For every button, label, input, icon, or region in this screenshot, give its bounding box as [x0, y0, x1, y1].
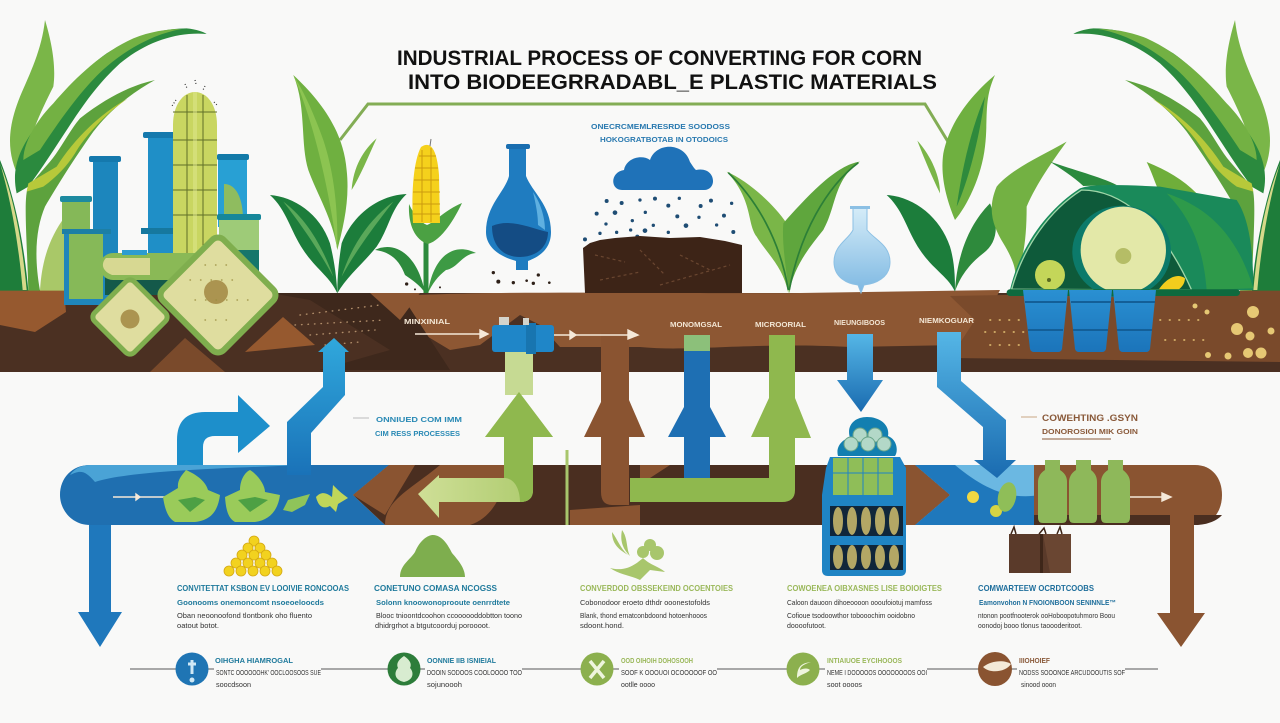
soil nuggets right	[1192, 304, 1274, 360]
title: INTO BIODEEGRRADABL_E PLASTIC MATERIALS	[408, 71, 937, 94]
tank: main left	[62, 229, 111, 305]
column 3 text: CONVERDOD OBSSEKEIND OCOENTOIES	[580, 583, 733, 593]
column 5 text: Eamonvohon N FNOIONBOON SENINNLE™	[979, 598, 1116, 607]
icon: green pile	[400, 535, 465, 577]
tank: upper left	[60, 196, 92, 231]
conveyor	[100, 250, 210, 280]
column 3 text: Blank, thond ernatconbdoond hotoenhooos	[580, 611, 707, 620]
cut block: small	[90, 277, 170, 357]
arrow: brown up	[584, 333, 645, 505]
column 4 text: Caloon dauoon dihoeoooon oooufoiotuj mamfoss	[787, 598, 932, 607]
left corn plant foliage	[0, 20, 207, 291]
small connector valve	[492, 317, 554, 354]
arrow: blue diagonal down	[937, 332, 1016, 478]
step 3	[580, 652, 717, 689]
icon: cloud	[613, 147, 713, 190]
pellets	[967, 480, 1019, 517]
arrow: blue down centre	[837, 334, 883, 412]
step 4: soot oooos	[827, 680, 862, 689]
column 4 text: Cofioue tsodoowthor tobooochim ooidobno	[787, 611, 915, 620]
soil labels: MICROORIAL	[755, 320, 806, 329]
column 5 text	[978, 583, 1116, 630]
arrow: blue curved right	[177, 395, 270, 465]
conveyor base	[105, 275, 255, 295]
step 5: sinood ooon	[1021, 680, 1056, 689]
step 2: OONNIE IIB ISNIEIAL	[427, 656, 496, 665]
column 4 text: COWOENEA OIBXASNES LISE BOIOIGTES	[787, 583, 942, 593]
column 2 text	[374, 583, 522, 630]
icon: sprig	[610, 530, 665, 580]
step 3: ootlle oooo	[621, 680, 655, 689]
title	[397, 47, 937, 94]
bottles	[1038, 460, 1130, 523]
soil specks below flask	[405, 271, 551, 290]
step 2: DOOIN SODOOS COOLOOOO TOO	[427, 668, 522, 677]
step 4: NEME I DOOOOOS OOOOOOOOS OOI	[827, 668, 927, 677]
column 4 text: doooofutoot.	[787, 621, 826, 630]
step 1: SONTC OOOOOOHK' OOCLOOSOOS SUE	[216, 668, 321, 677]
arrow: blue down left	[78, 525, 122, 647]
side caption left: ONNIUED COM IMM	[376, 415, 462, 424]
light flask	[834, 206, 890, 293]
label: caption above cloud: HOKOGRATBOTAB IN OTODOICS	[600, 135, 728, 144]
soil labels: MINXINIAL	[404, 317, 450, 326]
soil band	[0, 290, 1280, 372]
step 5: IIIOHOIEF	[1019, 656, 1050, 665]
column 2 text: CONETUNO COMASA NCOGSS	[374, 583, 497, 593]
arrow: brown down right	[1157, 500, 1205, 647]
side caption left: CIM RESS PROCESSES	[375, 429, 460, 438]
column 4 text	[787, 583, 942, 630]
leaves in pipe	[163, 470, 348, 522]
tube: tall centre	[141, 132, 177, 260]
step 1: OIHGHA HIAMROGAL	[215, 656, 293, 665]
side caption right: COWEHTING .GSYN	[1042, 413, 1138, 423]
flow arrows white	[113, 330, 1171, 501]
arrow: blue up with diagonal	[287, 338, 349, 475]
column 5 text: COMWARTEEW OCRDTCOOBS	[978, 583, 1094, 593]
column 3 text: Cobonodoor eroeto dthdr ooonestofolds	[580, 598, 710, 607]
soil labels: NIEMKOGUAR	[919, 316, 975, 325]
plant centre	[727, 162, 860, 293]
column 1 text: Oban neoonoofond tlontbonk oho fluento	[177, 611, 312, 620]
side caption left	[353, 415, 462, 438]
arrow: green U up	[630, 335, 811, 502]
blue cups	[1023, 290, 1156, 352]
step 3: SOOF K OOOUOI OCOOOOOF OO	[621, 668, 717, 677]
corn plant centre	[375, 139, 476, 293]
arrow: green up and left	[418, 345, 553, 518]
side caption right	[1021, 413, 1138, 439]
divider stem	[566, 450, 568, 525]
column 1 text: oatout botot.	[177, 621, 219, 630]
cut block: large	[157, 234, 279, 356]
step 5	[978, 652, 1125, 689]
column 2 text: Blooc tnioontdcoohon ccoooooddobtton toono	[376, 611, 522, 620]
arrow: blue up centre	[668, 335, 726, 478]
timeline	[130, 652, 1158, 689]
side caption right: DONOROSIOI MIK GOIN	[1042, 427, 1138, 436]
bag	[1009, 527, 1071, 573]
sprout plant right	[887, 75, 1067, 292]
falling dots	[583, 197, 735, 241]
soil mound	[583, 236, 742, 293]
column 5 text: oonodoj booo tlonus taoooderitoot.	[978, 621, 1082, 630]
tube: back right	[217, 154, 249, 227]
column 2 text: dhidrgrhot a btgutcoorduj poroooot.	[375, 621, 490, 630]
column 3 text: sdoont.hond.	[580, 621, 624, 630]
step 4	[786, 652, 927, 689]
step 3: OOD OIHOIH DOHOSOOH	[621, 656, 693, 665]
process pipe	[60, 465, 1222, 525]
seed box	[822, 417, 906, 576]
soil labels: MONOMGSAL	[670, 320, 722, 329]
title bracket line	[340, 104, 950, 145]
soil labels	[404, 316, 975, 329]
column 3 text	[580, 583, 733, 630]
blue flask	[486, 144, 551, 270]
step 1	[176, 652, 321, 689]
column 2 text: Solonn knoowonoprooute oenrrdtete	[376, 598, 510, 607]
tank: right	[217, 214, 261, 280]
step 2: sojunoooh	[427, 680, 462, 689]
column 1 text: Goonooms onemoncomt nsoeoeloocds	[177, 598, 324, 607]
step 2	[388, 652, 522, 689]
tube: back left	[89, 156, 121, 260]
corn cob	[172, 80, 218, 253]
factory with corn	[60, 80, 279, 357]
soil labels: NIEUNGIBOOS	[834, 318, 885, 327]
icon: corn pile	[224, 536, 282, 576]
label: caption above cloud: ONECRCMEMLRESRDE SOODOSS	[591, 122, 730, 131]
column 5 text: ntonon pootfnooterok ooHoboopotuhmoro Boou	[978, 611, 1115, 620]
title: INDUSTRIAL PROCESS OF CONVERTING FOR CORN	[397, 47, 922, 70]
label: caption above cloud	[591, 122, 730, 144]
sprout plant left	[270, 75, 407, 293]
step 5: NODSS SOOONOE ARCUDOOUTIS SOF	[1019, 668, 1125, 677]
green dome with disc	[1007, 162, 1253, 298]
step 1: soocdsoon	[216, 680, 251, 689]
column 1 text	[177, 583, 349, 630]
step 4: INTIAIUOE EYCIHOOOS	[827, 656, 902, 665]
right corn plant foliage	[1073, 20, 1280, 291]
column 1 text: CONVITETTAT KSBON EV LOOIVIE RONCOOAS	[177, 583, 349, 593]
